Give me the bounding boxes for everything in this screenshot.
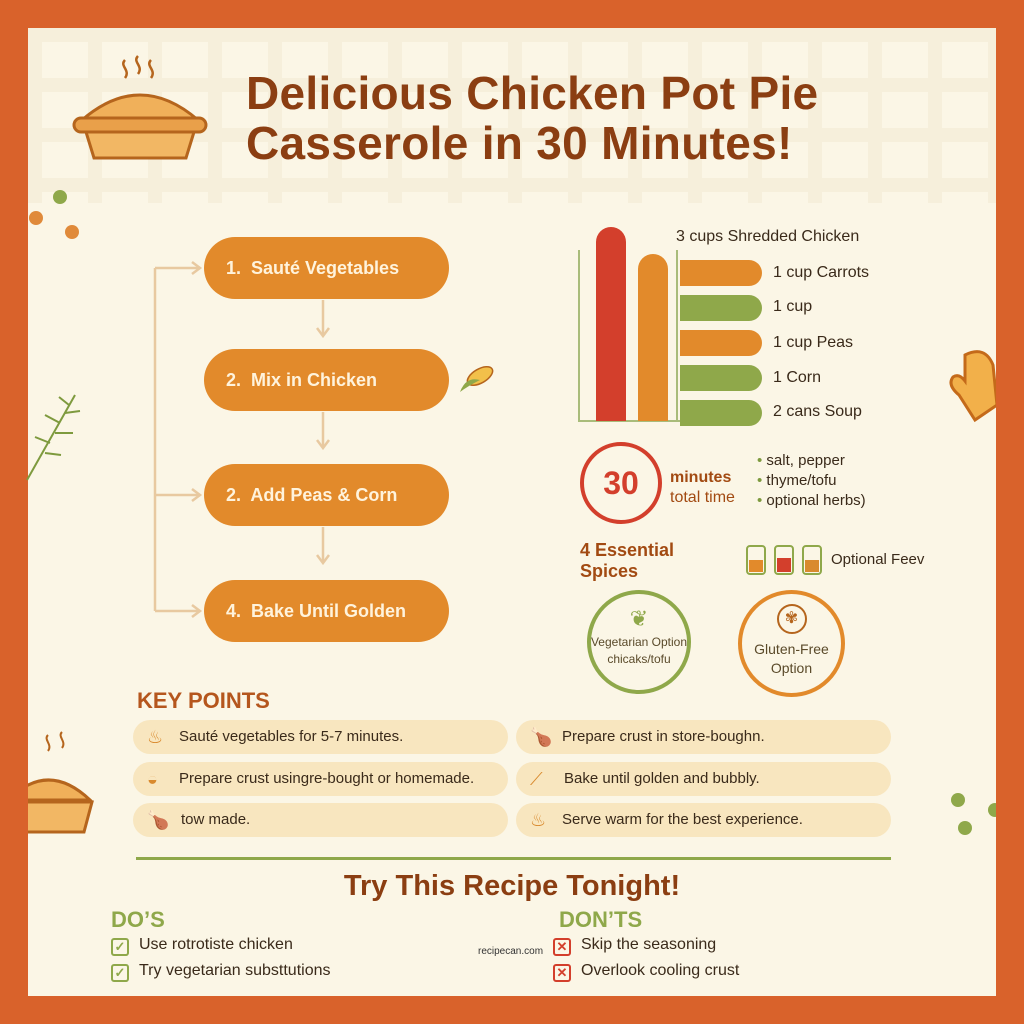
title bbox=[246, 67, 818, 169]
seasoning list: • optional herbs) bbox=[757, 492, 866, 509]
text: 1 cup bbox=[773, 298, 812, 315]
key points: Sauté vegetables for 5-7 minutes. bbox=[179, 728, 403, 745]
key points: tow made. bbox=[181, 811, 250, 828]
key points: ⟋ bbox=[530, 769, 543, 789]
step flow bbox=[154, 237, 449, 642]
icon: spice jars bbox=[746, 545, 822, 575]
text: 1 cup Peas bbox=[773, 334, 853, 351]
time badge: total time bbox=[670, 489, 735, 506]
key points heading: KEY POINTS bbox=[137, 688, 270, 713]
spices heading: Spices bbox=[580, 561, 638, 581]
badge: gluten-free: ✾ bbox=[785, 610, 798, 627]
text: 1 cup Carrots bbox=[773, 264, 869, 281]
badge: gluten-free bbox=[738, 590, 845, 697]
decorative peas right bbox=[951, 793, 996, 835]
key points: ♨ bbox=[530, 810, 546, 830]
do's: Try vegetarian substtutions bbox=[139, 962, 330, 979]
title: Casserole in 30 Minutes! bbox=[246, 117, 793, 169]
key points: Bake until golden and bubbly. bbox=[564, 770, 760, 787]
don'ts: ✕ bbox=[557, 965, 567, 980]
icon: pie bbox=[72, 55, 208, 160]
seasoning list: • salt, pepper bbox=[757, 452, 845, 469]
text: Optional Feev bbox=[831, 551, 924, 568]
seasoning list: • thyme/tofu bbox=[757, 472, 836, 489]
key points: Serve warm for the best experience. bbox=[562, 811, 803, 828]
spices heading: 4 Essential bbox=[580, 540, 674, 560]
do's: Use rotrotiste chicken bbox=[139, 936, 293, 953]
watermark: recipecan.com bbox=[478, 946, 543, 957]
don'ts: Skip the seasoning bbox=[581, 936, 716, 953]
do's: ✓ bbox=[115, 939, 125, 954]
time badge: minutes bbox=[670, 469, 731, 486]
cta heading: Try This Recipe Tonight! bbox=[344, 870, 680, 902]
time badge bbox=[580, 442, 735, 524]
badge: gluten-free: Option bbox=[771, 660, 812, 676]
don'ts bbox=[553, 907, 740, 982]
step 1: 1. Sauté Vegetables bbox=[226, 258, 399, 278]
key points: 🍗 bbox=[147, 810, 169, 830]
icon: corn bbox=[460, 366, 494, 392]
badge: vegetarian: chicaks/tofu bbox=[607, 652, 671, 666]
step 2: 2. Mix in Chicken bbox=[226, 370, 377, 390]
icon: oven mitt bbox=[949, 350, 996, 422]
time badge: 30 bbox=[603, 465, 639, 501]
step 4: 4. Bake Until Golden bbox=[226, 601, 406, 621]
step 4 bbox=[204, 580, 449, 642]
step 1 bbox=[204, 237, 449, 299]
step 3 bbox=[204, 464, 449, 526]
badge: vegetarian: Vegetarian Option bbox=[591, 635, 687, 649]
key points: ◒ bbox=[147, 769, 158, 789]
icon: rosemary bbox=[26, 394, 80, 480]
seasoning list bbox=[757, 452, 866, 509]
step 2 bbox=[204, 349, 449, 411]
key points bbox=[133, 720, 891, 837]
do's bbox=[111, 907, 330, 982]
key points: Prepare crust in store-boughn. bbox=[562, 728, 765, 745]
decorative pie bottom left bbox=[28, 731, 94, 834]
don'ts: Overlook cooling crust bbox=[581, 962, 739, 979]
decorative peas bbox=[29, 190, 79, 239]
ingredient bar chart bbox=[578, 227, 859, 422]
do's: DO’S bbox=[111, 907, 165, 932]
key points: ♨ bbox=[147, 727, 163, 747]
don'ts: ✕ bbox=[557, 939, 567, 954]
key points: Prepare crust usingre-bought or homemade. bbox=[179, 770, 474, 787]
do's: ✓ bbox=[115, 965, 125, 980]
text: 2 cans Soup bbox=[773, 403, 862, 420]
spices heading bbox=[580, 540, 674, 581]
text: 1 Corn bbox=[773, 369, 821, 386]
badge: vegetarian: ❦ bbox=[630, 606, 648, 631]
ingredient bar chart: 3 cups Shredded Chicken bbox=[676, 228, 859, 245]
badge: gluten-free: Gluten-Free bbox=[754, 641, 829, 657]
badge: vegetarian bbox=[587, 590, 691, 694]
step 3: 2. Add Peas & Corn bbox=[226, 485, 397, 505]
key points: 🍗 bbox=[530, 727, 552, 747]
don'ts: DON’TS bbox=[559, 907, 642, 932]
title: Delicious Chicken Pot Pie bbox=[246, 67, 818, 119]
